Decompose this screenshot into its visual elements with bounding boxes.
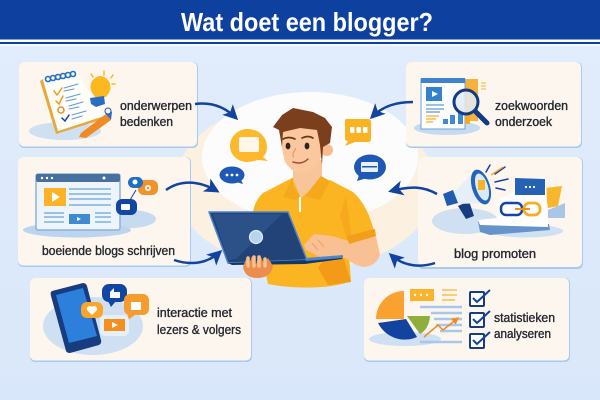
label: onderwerpen — [120, 99, 192, 113]
label: lezers & volgers — [157, 323, 241, 337]
label: blog promoten — [454, 247, 536, 261]
icon: blog browser window — [23, 174, 158, 238]
icon: pie chart and report — [369, 289, 490, 348]
arrow: lower schrijven to laptop — [174, 252, 220, 263]
hand — [243, 255, 273, 278]
icon: megaphone, envelope and link — [432, 165, 565, 238]
icon: browser with magnifier — [414, 78, 487, 135]
neck and collar — [293, 160, 322, 198]
arm — [304, 232, 380, 267]
blogger figure — [209, 108, 380, 288]
arrow: onderwerpen to blogger — [195, 104, 236, 118]
panel: onderwerpen bedenken — [19, 62, 198, 148]
label: boeiende blogs schrijven — [42, 244, 175, 258]
label: bedenken — [120, 115, 173, 129]
header banner — [0, 0, 600, 46]
panel: zoekwoorden onderzoek — [406, 62, 582, 148]
icon: checklist with bulb and pencil — [29, 71, 115, 140]
arrow: promoten to blogger — [391, 188, 437, 194]
label: statistieken — [494, 311, 555, 325]
eyes and brows — [286, 143, 309, 149]
label: onderzoek — [495, 115, 553, 129]
head — [280, 124, 323, 173]
speech bubbles — [220, 119, 386, 184]
panel: interactie met lezers en volgers — [30, 278, 252, 362]
label: analyseren — [494, 327, 551, 341]
arrow: schrijven to blogger — [166, 183, 217, 191]
shirt — [253, 178, 375, 288]
panel: boeiende blogs schrijven — [18, 157, 191, 267]
hair — [273, 108, 332, 165]
label: interactie met — [157, 306, 233, 320]
arrow: lower promoten to blogger — [391, 255, 435, 266]
icon: phone with social bubbles — [43, 283, 149, 355]
laptop — [209, 212, 307, 263]
label: zoekwoorden — [495, 99, 568, 113]
central backdrop — [175, 92, 435, 270]
arrow: zoekwoorden to blogger — [372, 102, 413, 117]
title: Wat doet een blogger? — [181, 7, 433, 37]
ear — [321, 144, 333, 156]
panel: statistieken analyseren — [364, 278, 570, 362]
panel: blog promoten — [418, 157, 583, 269]
